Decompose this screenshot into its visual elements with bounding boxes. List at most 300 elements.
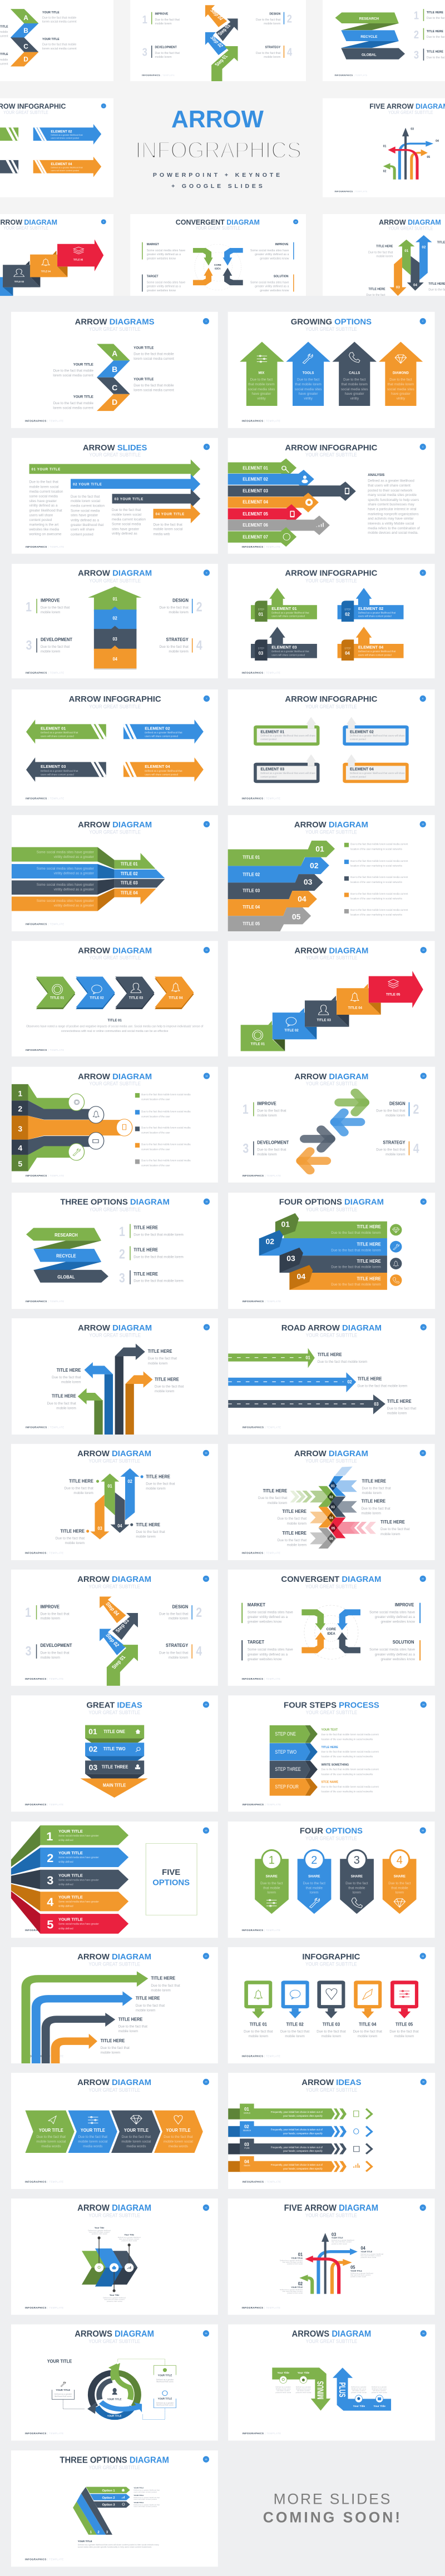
- four ribbon rows: PLAN: [244, 2147, 250, 2150]
- text blocks: mobile lorem: [56, 1407, 76, 1411]
- cropped slide: convergent diagram: greater websites know: [147, 289, 176, 292]
- four framed cards: ELEMENT 03: [260, 768, 284, 772]
- text blocks: Due to the fact that: [52, 1376, 81, 1379]
- arrow captions: posted to their social: [350, 2276, 366, 2278]
- step arrows: Step 01: [111, 1654, 127, 1670]
- page badge: 31: [205, 2207, 207, 2209]
- footer: INFOGRAPHICS | TEMPLATE: [242, 671, 280, 674]
- heading: [284, 2203, 378, 2218]
- chevron row: TITLE 03: [129, 996, 144, 1000]
- folded steps: TITLE 05: [386, 994, 400, 997]
- heading: YOUR GREAT SUBTITLE: [89, 1332, 141, 1338]
- four ribbon cards: STEP: [344, 647, 351, 650]
- heading: [281, 1575, 381, 1590]
- minus arrow: posted to their social: [275, 2391, 291, 2394]
- stair arrows: TITLE 04: [243, 905, 260, 910]
- footer: INFOGRAPHICS | TEMPLATE: [25, 1552, 64, 1555]
- four striped arrows: Defined as a greater likelihood that: [145, 770, 182, 772]
- legend: Due to the fact that mobile lorem social media current: [350, 860, 408, 862]
- cropped slide: convergent diagram: TARGET: [147, 275, 159, 278]
- caption: TITLE 01: [108, 1019, 122, 1023]
- legend: location of the user marketing in social networks: [350, 847, 403, 850]
- four striped arrows: [26, 719, 204, 782]
- column text: sites have greater: [71, 514, 98, 518]
- arrow labels: that mobile lorem: [388, 383, 414, 386]
- slide 4: arrow infographic elements list: [228, 438, 435, 554]
- arrow captions: 03: [332, 2232, 337, 2237]
- chevron row: TITLE 01: [50, 996, 65, 1000]
- heading: [294, 1449, 368, 1464]
- cropped slide: convergent diagram: CONVERGENT DIAGRAM: [176, 219, 260, 226]
- curved arrows: [26, 1971, 148, 2063]
- five pins: mobile lorem: [285, 2034, 305, 2038]
- funnel bands: 2: [18, 1104, 22, 1113]
- four ribbon rows: your hands; companies often specify: [283, 2150, 323, 2152]
- triple chevron: [82, 2236, 137, 2292]
- four ribbon rows: SALES: [244, 2165, 250, 2167]
- five pins: TITLE 03: [323, 2022, 340, 2027]
- text blocks: mobile lorem: [287, 1522, 306, 1526]
- column text: virility defined as a: [71, 518, 99, 522]
- step descriptions: Due to the fact that mobile lorem social media current: [322, 1750, 379, 1753]
- page badge: 33: [205, 2332, 207, 2335]
- four striped arrows: Defined as a greater likelihood that: [41, 770, 78, 772]
- five pins: mobile lorem: [358, 2034, 377, 2038]
- slide 32: five arrow diagram: [228, 2198, 435, 2315]
- page badge: 27: [205, 1955, 207, 1957]
- stacked ribbon: 02: [89, 1745, 97, 1754]
- text blocks: greater virility defined as a: [248, 1615, 288, 1619]
- text blocks: mobile lorem: [101, 2051, 120, 2055]
- heading: YOUR GREAT SUBTITLE: [305, 1584, 357, 1590]
- slide 2: growing options: [228, 312, 435, 428]
- analysis text: mobile devices and social media.: [368, 531, 418, 535]
- page badge: 19: [205, 1452, 207, 1455]
- text blocks: Due to the fact that: [118, 2024, 147, 2028]
- four ribbon cards: Defined as a greater likelihood that: [358, 611, 396, 614]
- step arrows: Step 04: [105, 1601, 121, 1616]
- footer: INFOGRAPHICS | TEMPLATE: [242, 2306, 280, 2309]
- text blocks: TITLE HERE: [146, 1474, 170, 1480]
- road arrows: [228, 1348, 385, 1414]
- text blocks: TITLE HERE: [263, 1488, 287, 1493]
- cropped slide: five arrow diagram: [323, 98, 445, 197]
- text blocks: Due to the fact that: [151, 1984, 180, 1988]
- cropped slide: arrow infographic elements: users will share content posted: [51, 137, 79, 139]
- option text: TITLE HERE: [134, 1272, 158, 1277]
- heading: [60, 1198, 170, 1213]
- text blocks: Due to the fact that: [380, 1527, 410, 1531]
- text blocks: TITLE HERE: [361, 1499, 385, 1504]
- five pins: TITLE 01: [250, 2022, 268, 2027]
- footer: INFOGRAPHICS: [25, 1929, 47, 1932]
- arrow captions: that users fill share content: [360, 2255, 381, 2257]
- footer: INFOGRAPHICS | TEMPLATE: [243, 1300, 281, 1303]
- analysis text: ANALYSIS: [368, 474, 384, 477]
- stacked ribbon: 03: [89, 1763, 97, 1771]
- text blocks: Due to the fact that: [361, 1507, 390, 1511]
- column text: content posted: [29, 518, 52, 522]
- four long arrows: 04 YOUR TITLE: [156, 513, 185, 516]
- page badge: 5: [206, 572, 207, 574]
- five folded arrows: Some social media sites have greater: [58, 1923, 99, 1925]
- cropped slide: convergent diagram: IDEA: [215, 267, 221, 270]
- arrow labels: virility: [397, 397, 406, 401]
- text blocks: greater websites know: [380, 1657, 416, 1661]
- text blocks: mobile lorem: [268, 1501, 287, 1505]
- folded steps: TITLE 01: [251, 1043, 265, 1046]
- analysis text: that users will share content: [368, 484, 411, 488]
- five pins: Due to the fact that: [280, 2030, 310, 2034]
- page badge: [421, 2330, 427, 2337]
- analysis text: and activists may have similar: [368, 517, 413, 521]
- four framed cards: Defined as a greater likelihood that users will share: [350, 772, 405, 775]
- step descriptions: Due to the fact that mobile lorem social media current: [322, 1785, 379, 1788]
- text blocks: TITLE HERE: [136, 1522, 160, 1527]
- text blocks: [47, 1349, 184, 1411]
- cropped slide: five arrow diagram: 05: [427, 156, 430, 159]
- page badge: [420, 1827, 426, 1834]
- cropped slide: interlocking arrows: 03: [396, 286, 400, 290]
- caption: Observers have noted a range of positive and negative impacts of social media use. Social media can help to improve individuals' sense of: [26, 1025, 204, 1029]
- heading: ARROW INFOGRAPHIC: [285, 443, 378, 453]
- four framed cards: [254, 717, 409, 783]
- converging bands: Some social media sites have greater: [37, 850, 94, 854]
- heading: YOUR GREAT SUBTITLE: [88, 2087, 140, 2093]
- callout text: YOUR TITLE: [56, 2389, 70, 2391]
- convergent arrows: [301, 1605, 360, 1659]
- text blocks: greater virility defined as a: [375, 1652, 416, 1656]
- four bands with tabs: 02: [265, 1237, 274, 1245]
- four ribbon rows: 03: [244, 2142, 249, 2147]
- stair arrows: TITLE 02: [243, 872, 260, 877]
- diagonal bands: Option 2: [102, 2496, 115, 2500]
- heading: [285, 694, 378, 709]
- text blocks: [258, 1479, 410, 1547]
- four framed cards: content posted: [260, 776, 277, 778]
- arrow captions: that users fill share content: [283, 2261, 303, 2264]
- five pins: Due to the fact that: [389, 2030, 419, 2034]
- cropped slide: stair arrow: TITLE 05: [73, 259, 83, 261]
- five pins: Due to the fact that: [244, 2030, 273, 2034]
- arrow captions: 04: [360, 2246, 365, 2251]
- cropped slide: arrow infographic elements: [0, 98, 113, 197]
- analysis text: have a particular interest in viral: [368, 508, 417, 512]
- slide 22: convergent diagram: [228, 1570, 435, 1686]
- four bands with tabs: Due to the fact that mobile lorem: [331, 1231, 381, 1235]
- cropped slide: ABCD arrows: TITLE: [0, 53, 8, 56]
- four chevrons: Due to the fact that: [164, 2135, 193, 2139]
- callout text: posted to their social: [121, 2240, 137, 2242]
- text blocks: IMPROVE: [395, 1602, 414, 1607]
- page badge: [204, 821, 210, 827]
- folded steps: TITLE 02: [284, 1029, 299, 1033]
- page badge: 22: [422, 1578, 424, 1580]
- cropped slide: three options: GLOBAL: [362, 53, 377, 57]
- four badges: lorem: [268, 1891, 276, 1895]
- heading: THREE OPTIONS DIAGRAM: [60, 1198, 170, 1207]
- slide 27: curved arrows: [11, 1947, 218, 2063]
- text blocks: YOUR TITLE: [134, 378, 154, 381]
- slide 17: branching arrows: [12, 1318, 218, 1435]
- heading: ARROW DIAGRAM: [294, 946, 368, 955]
- cropped slide: three options: 3: [414, 48, 419, 61]
- four long arrows: 03 YOUR TITLE: [115, 498, 144, 502]
- text blocks: STRATEGY: [166, 1643, 188, 1648]
- page badge: 12: [422, 949, 424, 951]
- callout text: likelihood that users: [55, 2395, 72, 2398]
- text blocks: 2: [413, 1101, 419, 1117]
- arrow labels: Due to the fact: [250, 378, 273, 381]
- column text: mobile lorem social: [71, 499, 100, 503]
- minus arrow: Defined as a greater: [296, 2386, 311, 2388]
- four chevrons: media words: [83, 2145, 102, 2148]
- legend: current location of the user: [141, 1098, 170, 1100]
- text blocks: lorem social media current: [53, 374, 93, 378]
- four striped arrows: ELEMENT 02: [145, 726, 170, 731]
- four badges: 1: [269, 1854, 275, 1867]
- cropped slide: stepped arrows: 1: [142, 13, 147, 26]
- slide 3: arrow slides: [12, 438, 218, 554]
- option captions: Defined as a greater likelihood that: [134, 2496, 160, 2499]
- arrow labels: have greater: [345, 392, 364, 396]
- four badges: SHARE: [266, 1875, 278, 1879]
- cropped slide: interlocking arrows: mobile lorem: [376, 255, 393, 259]
- arrow labels: TOOLS: [303, 371, 314, 375]
- four chevrons: YOUR TITLE: [39, 2128, 63, 2133]
- page badge: [203, 1827, 209, 1834]
- heading: YOUR GREAT SUBTITLE: [305, 1458, 357, 1464]
- arrow labels: social media sites: [295, 388, 322, 391]
- page badge: 24: [422, 1704, 424, 1706]
- option text: 2: [119, 1246, 125, 1262]
- text blocks: mobile lorem: [169, 1656, 188, 1660]
- footer: INFOGRAPHICS | TEMPLATE: [26, 1174, 65, 1177]
- heading: ARROW IDEAS: [301, 2078, 362, 2087]
- page badge: 35: [205, 2458, 207, 2460]
- four ribbon cards: [251, 588, 404, 661]
- converging bands: TITLE 03: [121, 880, 138, 885]
- page badge: 11: [206, 949, 207, 951]
- page badge: 13: [205, 1075, 207, 1077]
- heading: ARROW DIAGRAM: [78, 946, 152, 955]
- cropped slide: ABCD arrows: TITLE: [0, 26, 8, 29]
- cropped slide: convergent diagram: greater virility defined as a: [147, 253, 181, 256]
- interlocking arrows: 02: [128, 1479, 132, 1484]
- column text: users will share: [71, 528, 95, 532]
- text blocks: TITLE HERE: [151, 1976, 175, 1981]
- text blocks: TITLE HERE: [282, 1531, 306, 1536]
- ribbon: GLOBAL: [57, 1274, 75, 1279]
- slide 25: five options: [11, 1821, 218, 1938]
- text blocks: Due to the fact that: [40, 1651, 70, 1655]
- text blocks: mobile lorem: [118, 2029, 138, 2033]
- heading: [284, 1700, 379, 1715]
- heading: [294, 820, 368, 835]
- text blocks: Due to the fact that: [101, 2046, 130, 2050]
- four bands with tabs: Due to the fact that mobile lorem: [331, 1248, 381, 1252]
- text blocks: TITLE HERE: [69, 1479, 93, 1484]
- text blocks: Due to the fact that mobile: [134, 352, 174, 356]
- page badge: [420, 444, 426, 450]
- heading: [83, 443, 147, 458]
- heading: YOUR GREAT SUBTITLE: [89, 955, 141, 961]
- four badges: Due to the fact: [303, 1882, 325, 1885]
- text blocks: Due to the fact that: [136, 2004, 165, 2008]
- stacked arrow: 02: [113, 616, 117, 621]
- four chevrons: Due to the fact that: [122, 2135, 151, 2139]
- heading: [281, 1323, 382, 1338]
- four chevrons: [25, 2111, 203, 2153]
- footer: INFOGRAPHICS | TEMPLATE: [242, 420, 280, 423]
- text blocks: TARGET: [248, 1640, 264, 1645]
- four ribbon cards: STEP: [258, 647, 264, 650]
- cropped slide: convergent diagram: YOUR GREAT SUBTITLE: [196, 226, 240, 231]
- cropped slide: stepped arrows: Step 03: [216, 23, 232, 36]
- four badges: lorem: [310, 1891, 319, 1895]
- cropped slide: interlocking arrows: Due to the fact that: [368, 251, 393, 254]
- four badges: SHARE: [308, 1875, 320, 1879]
- arrow captions: posted to their social: [287, 2263, 303, 2265]
- page badge: [204, 1324, 210, 1331]
- step descriptions: WRITE SOMETHING: [322, 1763, 349, 1766]
- step descriptions: location of the user marketing in social networks: [322, 1790, 373, 1793]
- footer: INFOGRAPHICS | TEMPLATE: [26, 923, 65, 926]
- callout text: Defined as a greater: [156, 2402, 174, 2404]
- four framed cards: ELEMENT 01: [260, 730, 284, 734]
- text blocks: mobile lorem: [40, 1656, 60, 1660]
- page badge: 8: [422, 698, 423, 700]
- arrow labels: virility: [304, 397, 313, 401]
- column text: mobile lorem social: [29, 485, 59, 489]
- closing message: MORE SLIDES: [274, 2490, 392, 2508]
- slide 34: plus and minus arrows: [228, 2324, 435, 2441]
- heading: CONVERGENT DIAGRAM: [281, 1575, 381, 1584]
- heading: ARROWS DIAGRAM: [292, 2329, 371, 2339]
- legend: Due to the fact that mobile lorem social media current: [350, 909, 408, 911]
- diagonal bands: [73, 2487, 130, 2535]
- five folded arrows: 2: [47, 1851, 53, 1865]
- cropped slide: stepped arrows: DESIGN: [269, 13, 280, 16]
- chevron spine: 02: [329, 1496, 333, 1499]
- cropped slide: five arrow diagram: 01: [383, 145, 387, 148]
- step arrows: [100, 1596, 138, 1686]
- option text: 1: [119, 1224, 125, 1239]
- plus arrow: PLUS: [338, 2383, 347, 2398]
- text blocks: mobile lorem: [73, 1491, 93, 1495]
- cropped slide: convergent diagram: greater virility defined as a: [147, 285, 181, 289]
- text blocks: mobile lorem: [287, 1543, 306, 1547]
- five pins: mobile lorem: [394, 2034, 414, 2038]
- heading: YOUR GREAT SUBTITLE: [305, 1835, 357, 1842]
- cropped slide: three options: [323, 0, 445, 81]
- arrow labels: virility: [257, 397, 266, 401]
- callout text: YOUR TITLE: [158, 2398, 172, 2400]
- cropped slide: five arrow diagram: YOUR GREAT SUBTITLE: [388, 110, 433, 115]
- cropped slide: stepped arrows: Due to the fact that: [155, 18, 180, 22]
- heading: YOUR GREAT SUBTITLE: [305, 1961, 357, 1967]
- text blocks: greater websites know: [380, 1620, 416, 1624]
- heading: YOUR GREAT SUBTITLE: [89, 452, 141, 458]
- bottom caption: [78, 2540, 159, 2548]
- arrow labels: Due to the fact: [297, 378, 319, 381]
- five folded arrows: YOUR TITLE: [58, 1829, 83, 1834]
- cropped slide: three options: TITLE HERE: [427, 30, 443, 33]
- text blocks: Due to the fact that: [65, 1486, 93, 1490]
- cropped slide: three options: TITLE HERE: [427, 11, 443, 14]
- slide 6: ribbon arrows: [228, 564, 435, 678]
- cropped slide: convergent diagram: Some social media sites have: [250, 281, 289, 284]
- column text: virility defined as: [112, 532, 137, 536]
- option captions: YOUR TITLE: [134, 2494, 144, 2496]
- cropped slide: five arrow diagram: 04: [436, 140, 439, 143]
- heading: YOUR GREAT SUBTITLE: [305, 326, 357, 332]
- cropped slide: arrow infographic elements: ELEMENT 02: [51, 130, 72, 133]
- page badge: 14: [422, 1075, 424, 1077]
- page badge: [420, 318, 426, 324]
- text blocks: lorem social media current: [134, 389, 174, 393]
- page badge: [421, 1701, 427, 1708]
- four ribbon cards: 03: [259, 651, 264, 656]
- heading: YOUR GREAT SUBTITLE: [89, 326, 141, 332]
- footer: INFOGRAPHICS | TEMPLATE: [25, 2054, 64, 2057]
- heading: YOUR GREAT SUBTITLE: [88, 2464, 140, 2470]
- step chevrons: [270, 1725, 318, 1796]
- four ribbon rows: 04: [244, 2160, 249, 2165]
- callout text: Your Title: [110, 2294, 120, 2296]
- legend: Due to the fact that mobile lorem social media: [141, 1159, 191, 1162]
- text blocks: TITLE HERE: [101, 2038, 125, 2043]
- four ribbon cards: 04: [345, 651, 350, 656]
- text blocks: mobile lorem: [361, 1512, 381, 1516]
- step descriptions: YOUR TEXT: [322, 1729, 338, 1732]
- footer: INFOGRAPHICS | TEMPLATE: [25, 2181, 64, 2183]
- column text: working on awesome: [28, 532, 62, 536]
- heading: ARROW DIAGRAM: [77, 2203, 151, 2213]
- text blocks: MARKET: [248, 1602, 265, 1607]
- four text blocks: 4: [196, 637, 202, 653]
- interlocking arrows: 04: [117, 1523, 122, 1528]
- page badge: [421, 1324, 427, 1331]
- four framed cards: content posted: [350, 776, 366, 778]
- page label: YOUR TITLE: [47, 2359, 72, 2364]
- analysis text: posted to their social network: [368, 489, 413, 493]
- cropped slide: stair arrow: TITLE 03: [14, 280, 24, 283]
- funnel bands: [12, 1084, 132, 1171]
- heading: [301, 2078, 362, 2093]
- cropped slide: three options: INFOGRAPHICS | TEMPLATE: [335, 74, 368, 76]
- cropped slide: stepped arrows: 2: [287, 12, 292, 25]
- cropped slide: convergent diagram: greater websites know: [147, 257, 176, 260]
- callout text: posted to their social: [107, 2300, 122, 2302]
- text blocks: 1: [243, 1101, 249, 1117]
- legend: location of the user marketing in social networks: [350, 897, 403, 900]
- text blocks: Due to the fact that: [376, 1109, 406, 1113]
- legend: Due to the fact that mobile lorem social media: [141, 1110, 191, 1113]
- page badge: [204, 696, 210, 702]
- arrow labels: have greater: [391, 392, 411, 396]
- slide 31: chevron with callouts: [11, 2198, 218, 2315]
- option text: Due to the fact that mobile lorem: [134, 1279, 184, 1283]
- ABCD chevrons: A: [112, 349, 117, 358]
- cropped slide: stair arrow: TITLE 04: [41, 270, 51, 272]
- stacked ribbon: TITLE TWO: [103, 1746, 126, 1751]
- main title: INFOGRAPHICS: INFOGRAPHICS: [135, 137, 301, 163]
- text blocks: lorem social media current: [134, 357, 174, 361]
- option captions: Defined as a greater likelihood that: [134, 2489, 160, 2491]
- slide 14: rounded arrows: [228, 1067, 435, 1183]
- minus arrow: Defined as a greater: [276, 2386, 291, 2388]
